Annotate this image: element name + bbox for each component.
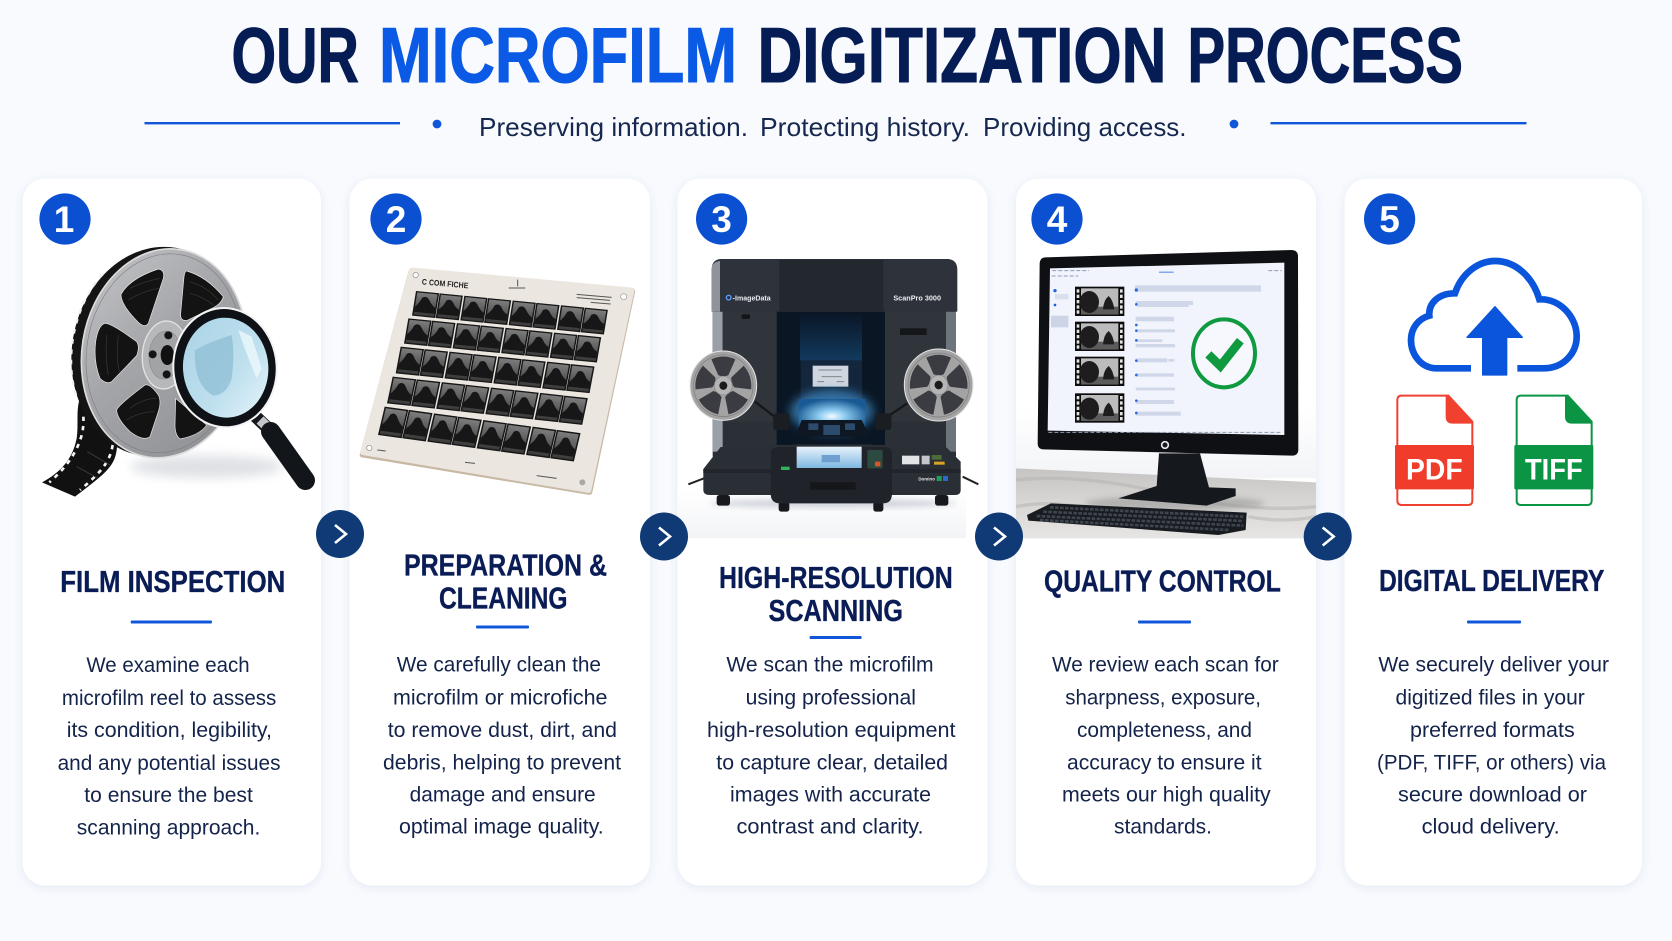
heading: PREPARATION & xyxy=(404,548,607,582)
panel: digital delivery xyxy=(1344,178,1642,886)
heading: SCANNING xyxy=(768,593,903,628)
description: optimal image quality. xyxy=(399,814,604,838)
description: We review each scan for xyxy=(1052,652,1279,676)
divider xyxy=(131,620,212,624)
badge: step 4 xyxy=(1031,193,1083,245)
icon: cloud upload xyxy=(1411,261,1577,375)
title: MICROFILM xyxy=(379,11,737,99)
description: We carefully clean the xyxy=(397,652,601,676)
description: microfilm or microfiche xyxy=(393,686,608,710)
arrow: step 1 to 2 xyxy=(316,510,364,558)
badge: step 5: 5 xyxy=(1379,199,1400,240)
description: preferred formats xyxy=(1410,718,1575,742)
description: to ensure the best xyxy=(84,783,253,807)
description: completeness, and xyxy=(1077,718,1252,742)
description: accuracy to ensure it xyxy=(1067,750,1262,774)
icon: PDF file: PDF xyxy=(1406,453,1463,486)
description xyxy=(1052,652,1279,838)
subtitle: Protecting history. xyxy=(760,112,970,142)
description: standards. xyxy=(1114,814,1212,838)
title: DIGITIZATION xyxy=(758,11,1166,99)
title: OUR xyxy=(232,11,359,99)
badge: step 1 xyxy=(39,193,91,245)
description: We examine each xyxy=(86,653,250,677)
subtitle: Providing access. xyxy=(983,112,1186,142)
subtitle: Preserving information. xyxy=(479,112,748,142)
photo backdrop xyxy=(678,490,966,538)
badge: step 3: 3 xyxy=(711,199,732,240)
icon: microfilm scanner xyxy=(688,259,978,512)
description: debris, helping to prevent xyxy=(383,750,621,774)
icon: microfiche sheet xyxy=(360,268,635,495)
description xyxy=(1377,652,1609,838)
icon: TIFF file xyxy=(1514,396,1593,505)
heading: CLEANING xyxy=(439,581,568,616)
description: scanning approach. xyxy=(77,816,260,840)
description: damage and ensure xyxy=(410,782,596,806)
badge: step 4: 4 xyxy=(1047,199,1068,240)
title xyxy=(232,11,1463,99)
description: meets our high quality xyxy=(1062,782,1271,806)
icon: PDF file xyxy=(1395,396,1474,505)
badge: step 2 xyxy=(370,193,422,245)
heading: FILM INSPECTION xyxy=(60,564,285,599)
description xyxy=(383,652,621,838)
icon: monitor with quality check xyxy=(1016,250,1316,538)
icon: TIFF file: TIFF xyxy=(1525,453,1583,486)
heading: DIGITAL DELIVERY xyxy=(1379,563,1605,598)
arrow: step 3 to 4 xyxy=(975,512,1023,560)
description: to capture clear, detailed xyxy=(716,750,948,774)
description: secure download or xyxy=(1398,782,1587,806)
description: and any potential issues xyxy=(58,751,280,775)
heading xyxy=(719,560,953,628)
description: cloud delivery. xyxy=(1422,814,1560,838)
description: high-resolution equipment xyxy=(707,718,956,742)
description: its condition, legibility, xyxy=(67,718,272,742)
heading: HIGH-RESOLUTION xyxy=(719,560,953,595)
description: images with accurate xyxy=(730,782,931,806)
divider xyxy=(810,636,862,639)
description: using professional xyxy=(746,686,916,710)
description xyxy=(58,653,280,840)
heading: QUALITY CONTROL xyxy=(1044,563,1281,598)
icon: microfilm scanner: ScanPro 3000 xyxy=(893,294,941,303)
badge: step 5 xyxy=(1364,193,1415,245)
subtitle xyxy=(144,112,1526,142)
description: contrast and clarity. xyxy=(736,814,924,838)
arrow: step 4 to 5 xyxy=(1304,512,1352,560)
badge: step 2: 2 xyxy=(386,199,406,240)
description: digitized files in your xyxy=(1396,686,1585,710)
badge: step 1: 1 xyxy=(54,199,74,240)
description xyxy=(707,652,956,838)
title: PROCESS xyxy=(1188,11,1463,99)
panel: quality control xyxy=(1016,178,1316,886)
icon: microfilm scanner: -ImageData xyxy=(733,295,771,302)
badge: step 3 xyxy=(696,193,747,245)
arrow: step 2 to 3 xyxy=(640,512,688,560)
divider xyxy=(476,626,529,628)
description: (PDF, TIFF, or others) via xyxy=(1377,750,1606,774)
panel: high-resolution scanning xyxy=(678,178,988,886)
description: microfilm reel to assess xyxy=(62,686,276,710)
description: We securely deliver your xyxy=(1378,652,1609,676)
description: sharpness, exposure, xyxy=(1065,686,1261,710)
icon: film reel with magnifier xyxy=(42,233,305,497)
panel: preparation and cleaning xyxy=(350,178,650,886)
icon: microfilm scanner: Domino xyxy=(918,477,935,482)
description: We scan the microfilm xyxy=(726,652,934,676)
icon: microfiche sheet: C COM FICHE xyxy=(421,277,469,290)
divider xyxy=(1138,620,1191,624)
description: to remove dust, dirt, and xyxy=(388,718,617,742)
divider xyxy=(1467,620,1521,624)
heading xyxy=(404,548,607,616)
panel: film inspection xyxy=(22,178,321,886)
